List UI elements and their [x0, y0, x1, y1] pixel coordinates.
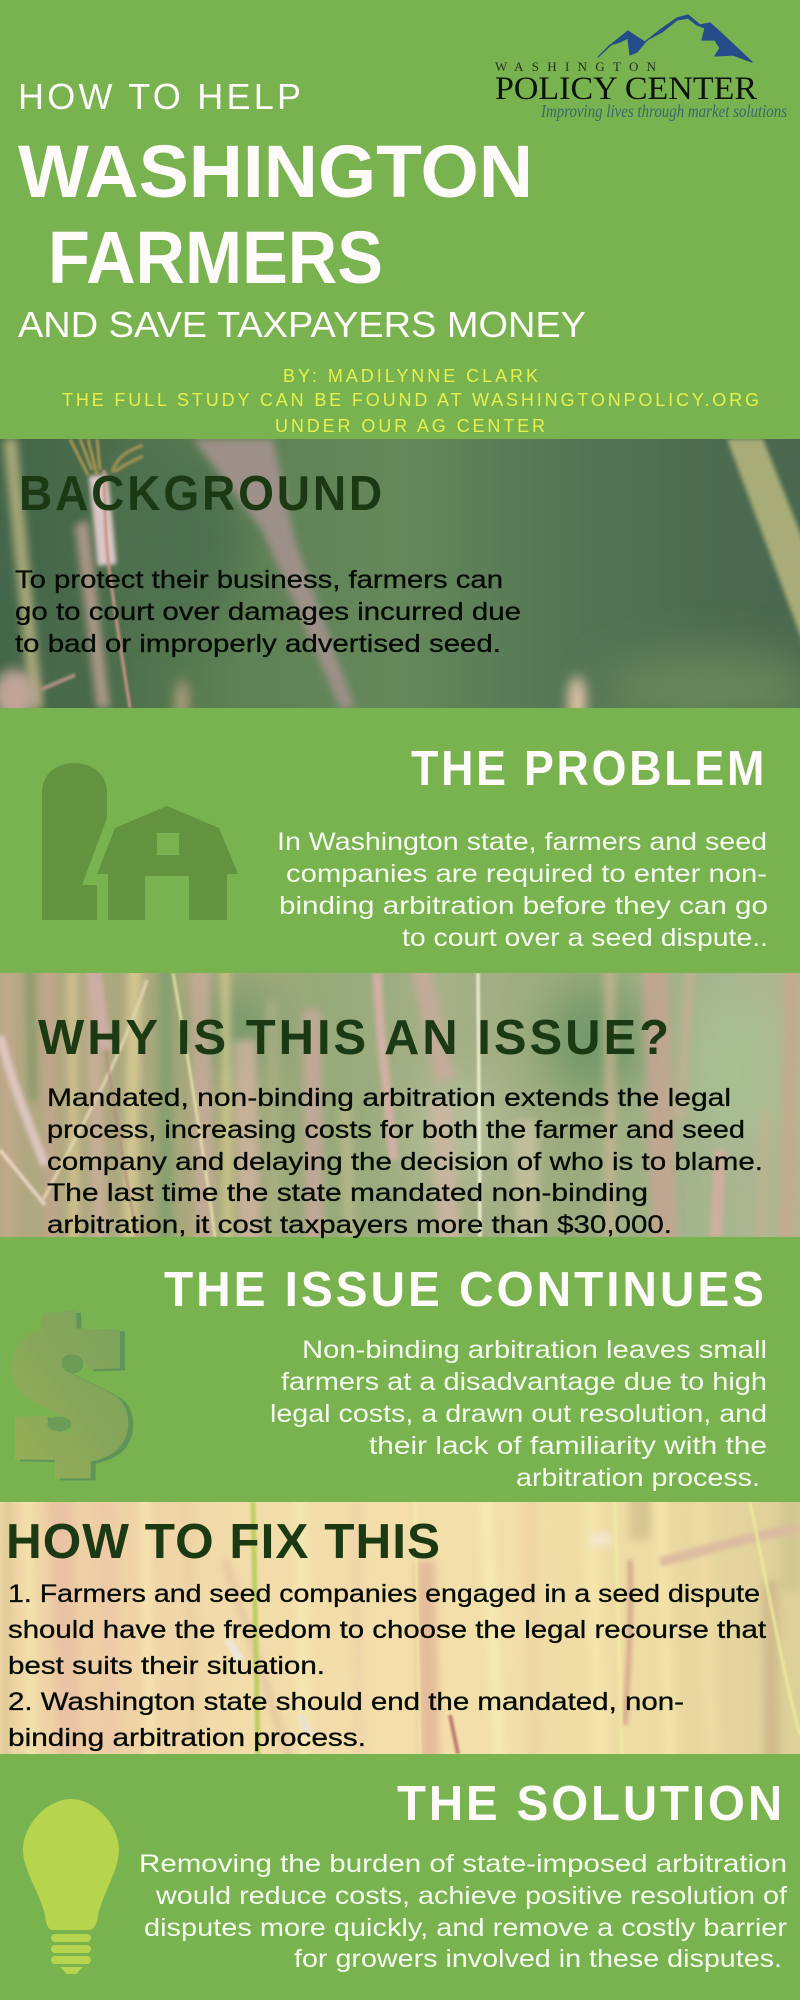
body text: binding arbitration before they can go	[279, 892, 768, 920]
body text: Removing the burden of state-imposed arbitration	[139, 1850, 787, 1878]
byline: THE FULL STUDY CAN BE FOUND AT WASHINGTONPOLICY.ORG	[62, 390, 759, 410]
body text: would reduce costs, achieve positive resolution of	[155, 1882, 787, 1910]
panel: the issue continues	[11, 1263, 767, 1492]
panel: background	[0, 439, 800, 730]
photo: tall pink and tan grasses	[0, 965, 800, 1245]
body text: should have the freedom to choose the legal recourse that	[8, 1616, 766, 1644]
body text: farmers at a disadvantage due to high	[281, 1368, 767, 1396]
panel: how to fix this	[0, 1495, 800, 1760]
title: WASHINGTON	[18, 130, 533, 213]
body text: In Washington state, farmers and seed	[277, 828, 767, 856]
icon: barn and silo	[42, 763, 238, 920]
body text: to bad or improperly advertised seed.	[15, 630, 501, 658]
byline: BY: MADILYNNE CLARK	[283, 366, 538, 386]
body text: their lack of familiarity with the	[369, 1432, 767, 1460]
body text: The last time the state mandated non-binding	[47, 1179, 648, 1207]
body text: Non-binding arbitration leaves small	[302, 1336, 767, 1364]
body text: 1. Farmers and seed companies engaged in a seed dispute	[8, 1580, 760, 1608]
body text: 2. Washington state should end the mandated, non-	[8, 1688, 684, 1716]
heading: THE PROBLEM	[411, 742, 767, 796]
body text: disputes more quickly, and remove a costly barrier	[144, 1914, 787, 1942]
heading: THE ISSUE CONTINUES	[164, 1263, 767, 1317]
body text: to court over a seed dispute..	[402, 924, 768, 952]
icon: mountain	[598, 15, 752, 62]
panel: the solution	[23, 1777, 787, 1974]
body text: company and delaying the decision of who is to blame.	[47, 1148, 763, 1176]
body text	[15, 566, 521, 658]
body text	[47, 1084, 763, 1239]
body text: arbitration process.	[516, 1464, 760, 1492]
logo: Washington Policy Center: POLICY CENTER	[495, 71, 757, 107]
body text: process, increasing costs for both the farmer and seed	[47, 1116, 745, 1144]
heading: WHY IS THIS AN ISSUE?	[38, 1011, 672, 1065]
body text: binding arbitration process.	[8, 1724, 366, 1752]
photo: blurred grass on dark green	[0, 439, 800, 730]
logo: Washington Policy Center	[495, 15, 787, 121]
panel: header	[18, 15, 787, 436]
body text: go to court over damages incurred due	[15, 598, 521, 626]
body text: arbitration, it cost taxpayers more than $30,000.	[47, 1211, 672, 1239]
photo: bright golden grasses	[0, 1495, 800, 1760]
title: HOW TO HELP	[18, 76, 301, 117]
body text	[277, 828, 768, 952]
title	[18, 76, 586, 345]
body text: legal costs, a drawn out resolution, and	[270, 1400, 767, 1428]
byline: UNDER OUR AG CENTER	[275, 416, 545, 436]
heading: THE SOLUTION	[397, 1777, 785, 1831]
body text: Mandated, non-binding arbitration extends the legal	[47, 1084, 731, 1112]
icon: dollar sign	[11, 1311, 133, 1480]
body text: To protect their business, farmers can	[15, 566, 503, 594]
heading: HOW TO FIX THIS	[6, 1515, 441, 1569]
panel: the problem	[42, 742, 768, 952]
body text: best suits their situation.	[8, 1652, 325, 1680]
body text	[139, 1850, 787, 1973]
title: FARMERS	[48, 216, 383, 299]
body text	[270, 1336, 767, 1492]
byline	[62, 366, 759, 436]
panel: why is this an issue	[0, 965, 800, 1245]
body text: companies are required to enter non-	[286, 860, 767, 888]
body text: for growers involved in these disputes.	[294, 1945, 782, 1973]
heading: BACKGROUND	[19, 467, 385, 521]
icon: light bulb	[23, 1799, 119, 1974]
body text	[8, 1580, 766, 1752]
logo: Washington Policy Center: WASHINGTON	[495, 59, 657, 74]
title: AND SAVE TAXPAYERS MONEY	[18, 304, 586, 345]
